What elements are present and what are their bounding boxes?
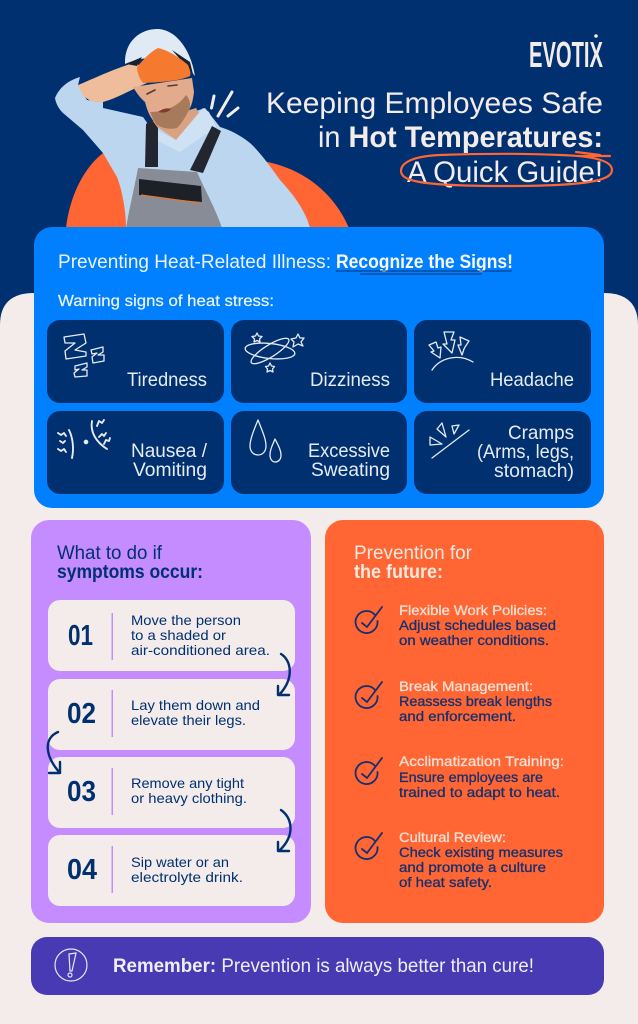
- arrow: step 2 to 3: [48, 732, 60, 773]
- orange blob behind worker: [66, 153, 349, 228]
- pocket trim: [141, 195, 200, 203]
- icon: head with lightning bolts: [429, 332, 473, 370]
- title: [266, 87, 603, 189]
- step 2: [48, 679, 295, 750]
- label: [131, 440, 208, 481]
- card: tiredness: [47, 320, 224, 403]
- collar: [150, 108, 216, 152]
- banner: remember: [31, 937, 604, 995]
- title: in Hot Temperatures:: [318, 121, 603, 154]
- eyes: [147, 85, 177, 94]
- label: [477, 422, 574, 482]
- card: headache: [414, 320, 591, 403]
- item: cultural review: of heat safety.: [399, 874, 492, 890]
- item: break management: Break Management:: [399, 678, 533, 694]
- step 4: electrolyte drink.: [131, 869, 243, 885]
- glove: [137, 48, 190, 83]
- panel heading: the future:: [354, 561, 443, 583]
- step 1: to a shaded or: [131, 627, 226, 643]
- label: Tiredness: [127, 369, 207, 391]
- arrow: step 3 to 4: [278, 810, 291, 851]
- bib pocket: [139, 179, 202, 202]
- helmet shadow band: [126, 50, 193, 74]
- panel heading: What to do if: [57, 542, 163, 564]
- panel heading: [354, 542, 472, 583]
- item: cultural review: and promote a culture: [399, 859, 546, 875]
- face: [133, 78, 194, 129]
- label: stomach): [494, 460, 574, 482]
- item: flexible work policies: [356, 602, 556, 648]
- step 3: 03: [67, 776, 96, 808]
- label: (Arms, legs,: [477, 441, 574, 463]
- panel: prevention for the future: [325, 520, 604, 923]
- step 4: 04: [67, 854, 97, 886]
- icon: exclamation: [55, 949, 87, 981]
- forearm: [78, 62, 147, 102]
- step 3: Remove any tight: [131, 775, 244, 791]
- panel heading: symptoms occur:: [57, 561, 203, 583]
- label: Vomiting: [133, 459, 207, 481]
- arrow: step 1 to 2: [278, 654, 290, 695]
- icon: cramps: [430, 423, 469, 458]
- label: Sweating: [311, 459, 390, 481]
- card: dizziness: [231, 320, 407, 403]
- step 4: [48, 835, 295, 906]
- step 2: 02: [67, 698, 96, 730]
- item: acclimatization training: trained to adapt to heat.: [399, 784, 560, 800]
- item: flexible work policies: Adjust schedules based: [399, 617, 556, 633]
- mouth: [158, 108, 171, 113]
- label: Dizziness: [310, 369, 390, 391]
- label: Nausea /: [131, 440, 208, 462]
- item: cultural review: Cultural Review:: [399, 829, 506, 845]
- step 1: Move the person: [131, 612, 241, 628]
- hand-drawn circle around subtitle: [401, 152, 612, 186]
- item: break management: Reassess break lengths: [399, 693, 552, 709]
- item: break management: and enforcement.: [399, 708, 516, 724]
- step 1: [48, 600, 295, 671]
- step 2: Lay them down and: [131, 697, 260, 713]
- stress marks: [212, 92, 238, 116]
- panel heading: [58, 251, 513, 274]
- panel heading: Preventing Heat-Related Illness:: [58, 251, 331, 273]
- shirt: [55, 77, 310, 228]
- label: Excessive: [308, 440, 390, 462]
- step 2: elevate their legs.: [131, 712, 246, 728]
- item: flexible work policies: on weather conditions.: [399, 632, 549, 648]
- item: acclimatization training: Acclimatization Training:: [399, 753, 564, 769]
- overall bib: [126, 168, 222, 228]
- item: cultural review: [356, 829, 563, 890]
- beard: [150, 95, 190, 129]
- card: cramps: [414, 411, 591, 494]
- item: acclimatization training: Ensure employees are: [399, 769, 543, 785]
- step 4: Sip water or an: [131, 854, 229, 870]
- neck: [150, 108, 207, 140]
- card: nausea: [47, 411, 224, 494]
- logo: [529, 34, 603, 75]
- panel: recognize the signs: [34, 227, 604, 508]
- item: cultural review: Check existing measures: [399, 844, 563, 860]
- lower cream background: [0, 293, 638, 1024]
- label: Cramps: [508, 422, 574, 444]
- overall straps: [145, 120, 221, 173]
- icon: sweat drops: [250, 420, 281, 462]
- card: sweating: [231, 411, 407, 494]
- title: A Quick Guide!: [407, 156, 603, 189]
- step 1: 01: [68, 620, 93, 652]
- step 1: air-conditioned area.: [131, 642, 270, 658]
- step 3: or heavy clothing.: [131, 790, 247, 806]
- item: break management: [356, 678, 552, 724]
- panel heading: [57, 542, 203, 583]
- helmet: [125, 29, 195, 76]
- icon: dizzy stars and orbits: [244, 333, 304, 372]
- step 3: [48, 757, 295, 828]
- item: acclimatization training: [356, 753, 564, 800]
- item: flexible work policies: Flexible Work Policies:: [399, 602, 547, 618]
- panel heading: Prevention for: [354, 542, 472, 564]
- label: Headache: [490, 369, 574, 391]
- subheading: Warning signs of heat stress:: [58, 293, 274, 310]
- title: Keeping Employees Safe: [266, 87, 603, 120]
- header background: [0, 0, 638, 340]
- label: [308, 440, 390, 481]
- panel: what to do if symptoms occur: [31, 520, 311, 923]
- icon: sleep Zs: [64, 334, 104, 377]
- panel heading: Recognize the Signs!: [336, 251, 513, 273]
- illustration: tired worker: [55, 29, 310, 228]
- icon: nausea marks: [58, 420, 110, 458]
- banner text: Remember: Prevention is always better than cure!: [113, 955, 534, 977]
